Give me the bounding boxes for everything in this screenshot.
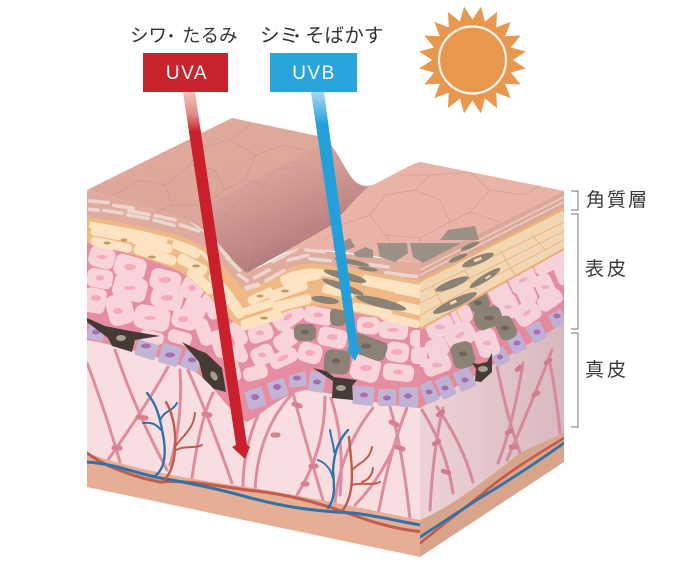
- basal nuclei right: [426, 314, 560, 394]
- collagen fibers right: [422, 350, 560, 510]
- corneum left: [87, 190, 420, 292]
- label: epidermis: 表皮: [585, 258, 626, 280]
- top skin surface: [87, 118, 564, 273]
- label: wrinkles and sagging: シワ: [130, 25, 167, 46]
- label: spots and freckles: シミ: [260, 25, 299, 47]
- pigmented nuclei left: [301, 330, 371, 364]
- pigment spindles right: [431, 250, 502, 317]
- corneum stripes right: [420, 197, 564, 275]
- left face of skin block: [82, 190, 427, 557]
- spinous nuclei left: [91, 255, 403, 374]
- raised peak surface: [87, 118, 564, 273]
- fiber cross ties right: [434, 360, 550, 473]
- capillary tree red: [163, 402, 380, 510]
- dermis left: [87, 335, 420, 525]
- UVA arrow: [183, 92, 250, 459]
- dermis right: [420, 322, 564, 525]
- melanocyte nuclei left: [116, 335, 346, 391]
- melanocyte right: [472, 353, 492, 382]
- surface cell outlines: [115, 125, 540, 273]
- melanocytes dark left: [87, 318, 357, 400]
- granular cream layer right: [420, 208, 564, 330]
- bracket: dermis: [571, 333, 578, 427]
- label: wrinkles and sagging: ・: [163, 29, 179, 46]
- UVA badge: UVA: [166, 63, 208, 84]
- pigment spindle pale centers: [449, 257, 491, 305]
- basal layer right: [420, 305, 564, 408]
- blood vessels left: [87, 453, 427, 532]
- capillary tree blue: [143, 393, 348, 508]
- cream cell nuclei: [104, 238, 289, 320]
- pigmented cells left: [294, 308, 389, 375]
- icon: sun: [418, 6, 527, 114]
- corneum bricks left: [88, 199, 418, 291]
- UVA badge: [143, 53, 228, 92]
- right face of skin block: [414, 191, 572, 557]
- blood vessels right: [414, 438, 564, 548]
- bracket: epidermis: [571, 214, 578, 329]
- pigmented cells right: [450, 294, 517, 369]
- collagen fibers left: [87, 350, 410, 520]
- basal layer left: [87, 312, 420, 422]
- label: wrinkles and sagging: たるみ: [182, 25, 238, 46]
- label: spots and freckles: ・: [289, 29, 305, 46]
- pigment spindles in corneum: [334, 258, 378, 272]
- basal cells right: [418, 304, 568, 405]
- corneum right: [420, 191, 564, 282]
- spinous nuclei right: [432, 276, 549, 368]
- lower edge of cream layer right: [420, 249, 564, 329]
- granular cream layer left: [87, 215, 420, 328]
- pigment spindles in corneum right: [448, 240, 480, 264]
- UVB arrow: [311, 92, 361, 361]
- pink spinous layer right: [420, 267, 564, 383]
- label: dermis: 真皮: [585, 359, 626, 381]
- bracket: stratum corneum: [571, 191, 578, 210]
- basal nuclei left: [92, 330, 412, 400]
- fat layer right: [420, 433, 564, 557]
- dark fold slope: [205, 141, 368, 273]
- pink spinous layer left: [87, 240, 420, 396]
- spinous cells left: [82, 244, 425, 384]
- orange band right: [420, 209, 564, 281]
- pigment spots on surface: [333, 226, 479, 263]
- spinous cells right: [420, 250, 564, 377]
- pigment nuclei right: [459, 300, 509, 356]
- cream cell lines right: [420, 222, 564, 322]
- UVB badge: UVB: [292, 63, 336, 84]
- pigment spindles in cream layer: [311, 269, 406, 311]
- fiber cross ties left: [114, 404, 403, 484]
- cream cells left: [88, 219, 425, 331]
- skin block cross-section: [82, 118, 572, 557]
- label: spots and freckles: そばかす: [305, 25, 383, 47]
- flat right surface: [247, 162, 564, 273]
- orange band under corneum left: [87, 219, 420, 294]
- label: stratum corneum: 角質層: [586, 189, 647, 211]
- basal cells left: [86, 321, 418, 410]
- fat layer left: [87, 453, 420, 557]
- UVB badge: [270, 53, 357, 92]
